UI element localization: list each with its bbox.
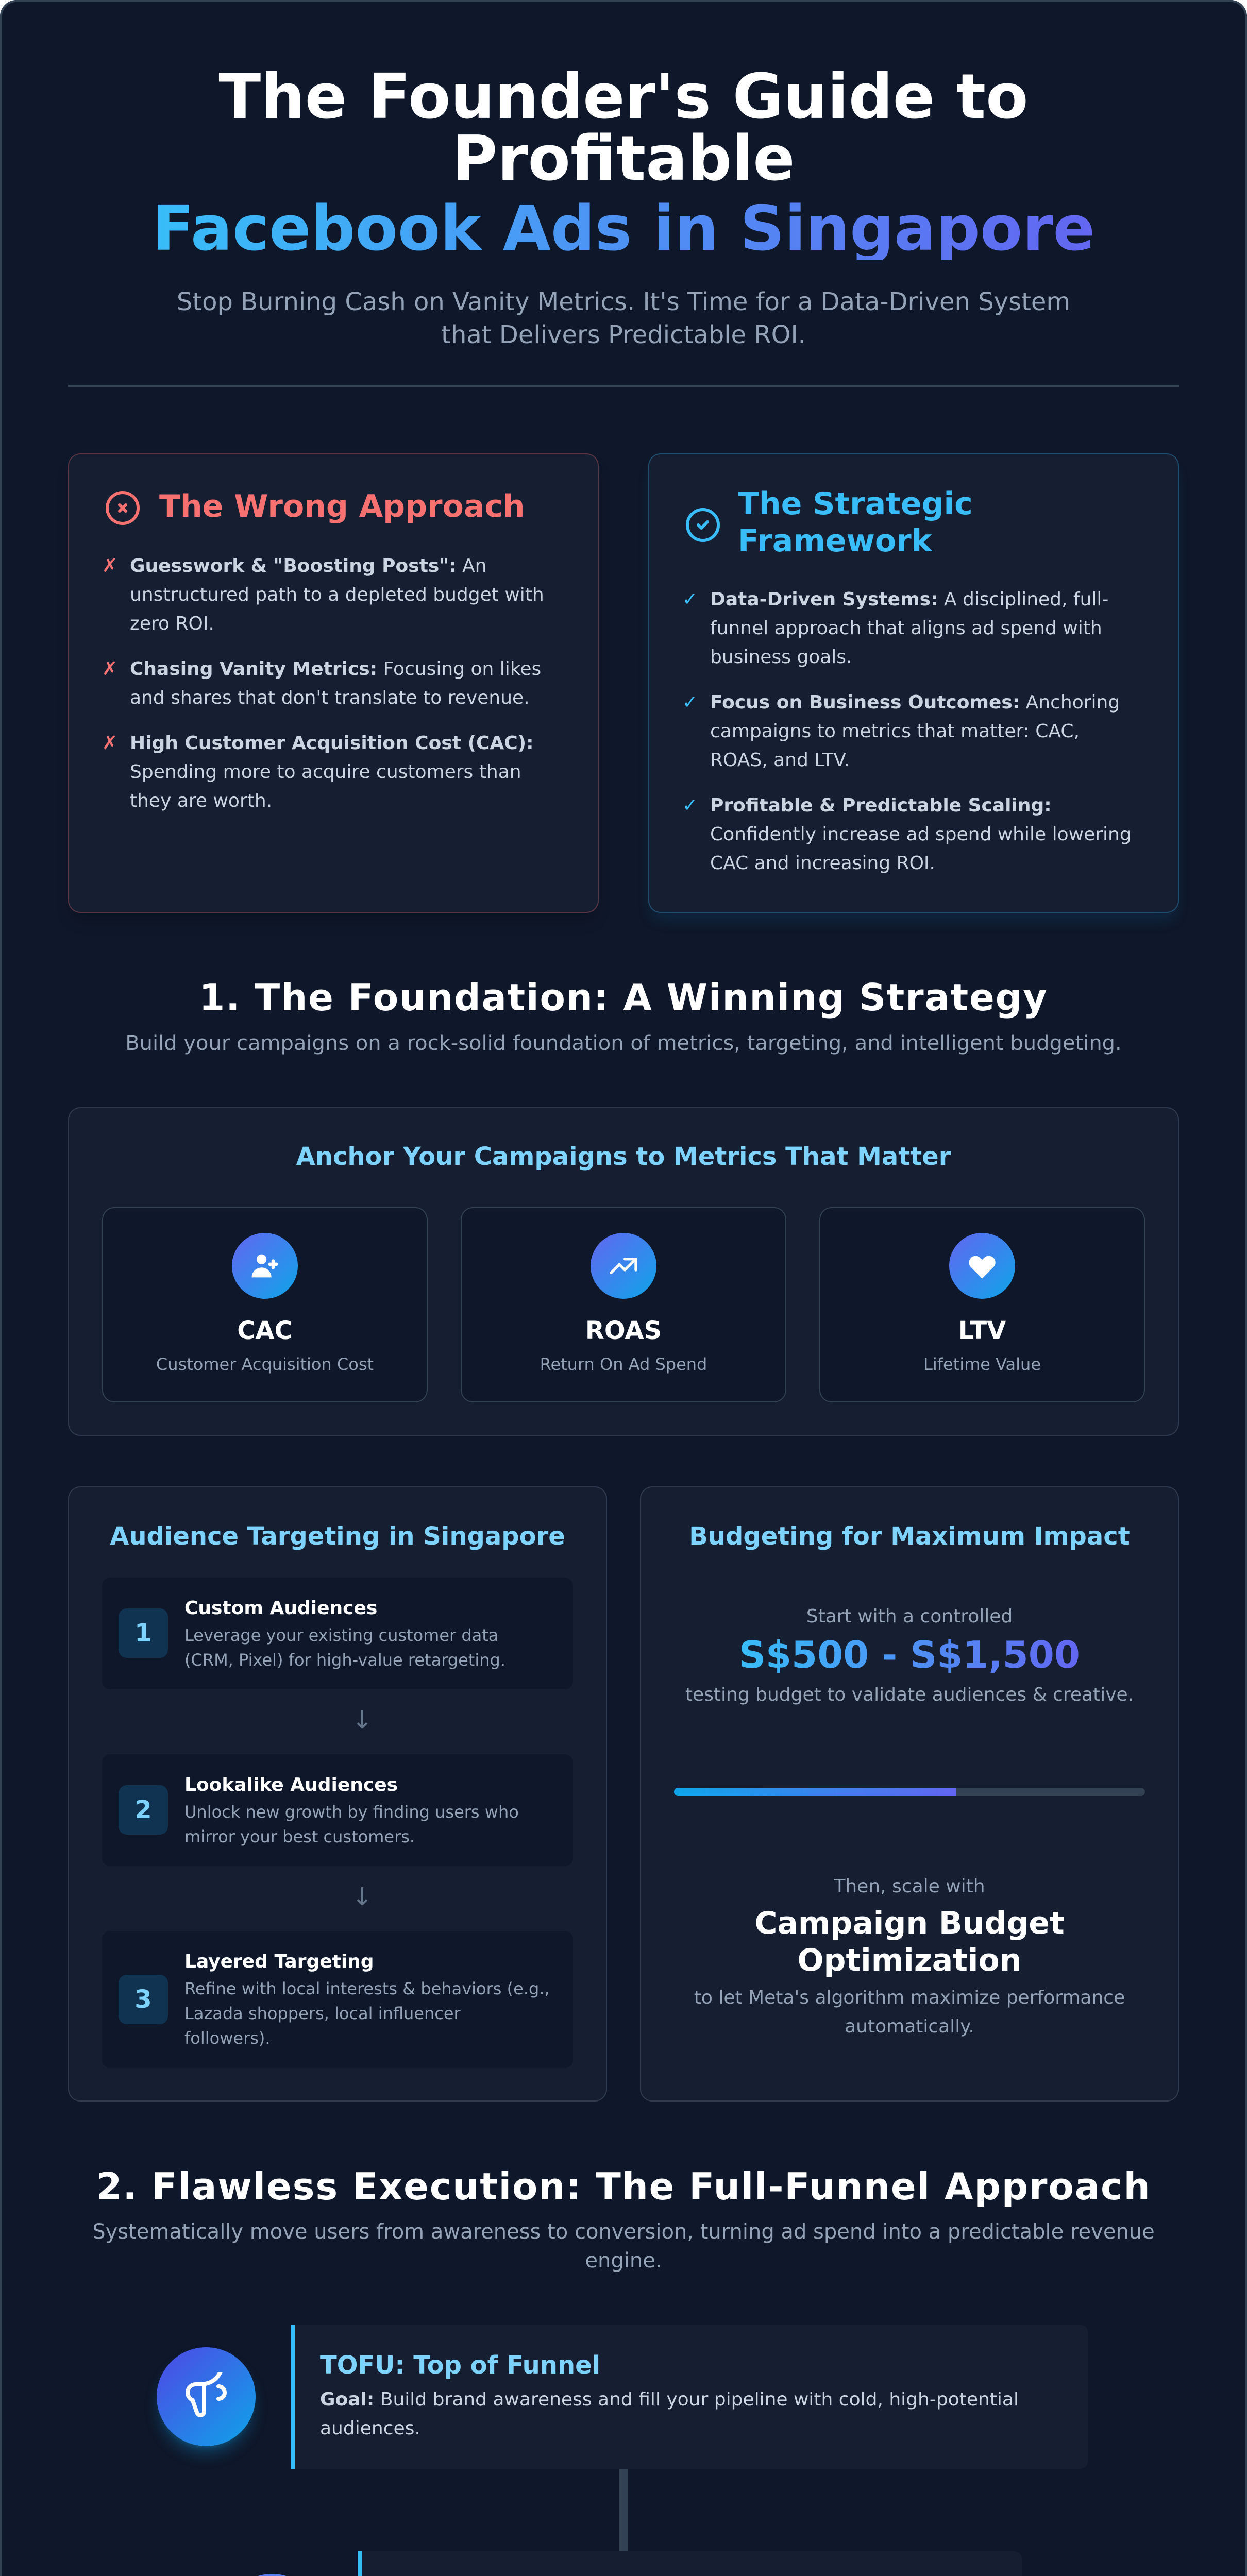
list item: high CAC: High Customer Acquisition Cost (CAC): — [130, 733, 534, 754]
heading: the strategic framework: Framework — [738, 523, 932, 559]
icon: light bulb — [223, 2574, 322, 2576]
subtitle: Stop Burning Cash on Vanity Metrics. It's Time for a Data-Driven System — [177, 287, 1070, 316]
stage goal — [320, 2389, 1019, 2439]
list item: business outcomes: ROAS, and LTV. — [710, 750, 850, 771]
funnel stage: MOFU — [258, 2551, 362, 2576]
icon: megaphone — [157, 2347, 256, 2446]
list item: vanity metrics: and shares that don't translate to revenue. — [130, 687, 530, 708]
text: testing budget: testing budget to validate audiences & creative. — [685, 1684, 1134, 1705]
step title: Lookalike Audiences — [184, 1774, 398, 1795]
list item: vanity metrics: ✗ — [102, 658, 117, 680]
icon: x in circle — [106, 491, 140, 525]
funnel stage: TOFU — [153, 2325, 1019, 2469]
list item: data-driven systems — [682, 589, 1108, 668]
list item: data-driven systems: funnel approach that aligns ad spend with — [710, 618, 1102, 639]
panel: metrics that matter — [68, 1107, 1179, 1436]
title: Profitable — [452, 123, 795, 195]
icon: user plus — [232, 1233, 298, 1299]
list item: vanity metrics — [102, 658, 541, 708]
panel: the wrong approach — [68, 453, 599, 913]
step title: Layered Targeting — [184, 1951, 374, 1972]
heading: the strategic framework: The Strategic — [738, 486, 973, 522]
arrow: ↓ — [352, 1883, 373, 1911]
arrow: ↓ — [352, 1706, 373, 1735]
subheading: section 1: Build your campaigns on a rock-solid foundation of metrics, targeting, and intelligent budgeting. — [125, 1031, 1122, 1055]
metric name: ROAS — [585, 1316, 662, 1345]
title — [152, 61, 1095, 265]
step 1: custom audiences — [102, 1578, 573, 1689]
heading: metrics: Anchor Your Campaigns to Metrics That Matter — [296, 1142, 951, 1171]
list item: high CAC — [102, 733, 534, 811]
list item: profitable scaling: Confidently increase ad spend while lowering — [710, 824, 1132, 845]
step 2: lookalike audiences — [102, 1754, 573, 1866]
icon: check in circle — [686, 508, 720, 542]
step title: Custom Audiences — [184, 1598, 377, 1619]
list item: guesswork: zero ROI. — [130, 613, 214, 634]
text: meta algorithm — [694, 1987, 1125, 2037]
list item: business outcomes: ✓ — [682, 692, 698, 713]
step description: Refine with local interests & behaviors (e.g., — [184, 1979, 550, 1998]
list item: guesswork: unstructured path to a depleted budget with — [130, 584, 544, 605]
step number: 3 — [134, 1985, 152, 2014]
heading: section 1: 1. The Foundation: A Winning Strategy — [199, 976, 1048, 1019]
metric description: Return On Ad Spend — [540, 1354, 707, 1374]
subtitle — [177, 287, 1070, 349]
stage goal: audiences. — [320, 2418, 420, 2439]
step number — [119, 1785, 168, 1835]
list item: business outcomes — [682, 692, 1120, 771]
subheading: section 2: Systematically move users from awareness to conversion, turning ad spend into a predictable revenue — [92, 2220, 1155, 2244]
progress bar — [674, 1788, 1145, 1796]
step description: mirror your best customers. — [184, 1827, 415, 1846]
step description: (CRM, Pixel) for high-value retargeting. — [184, 1650, 505, 1670]
panel: the strategic framework — [648, 453, 1179, 913]
list item: data-driven systems: business goals. — [710, 647, 852, 668]
subtitle: that Delivers Predictable ROI. — [441, 320, 806, 349]
title highlight: Facebook Ads in Singapore: Facebook Ads in Singapore — [152, 193, 1095, 265]
list item: guesswork: Guesswork & "Boosting Posts": An — [130, 555, 486, 577]
metric name: CAC — [237, 1316, 293, 1345]
heading: the wrong approach: The Wrong Approach — [159, 488, 525, 524]
list item: guesswork — [102, 555, 544, 634]
metric description: Lifetime Value — [923, 1354, 1041, 1374]
step number — [119, 1975, 168, 2024]
list item: high CAC: they are worth. — [130, 790, 272, 811]
metric card: CAC — [102, 1207, 428, 1402]
stage title — [386, 2575, 720, 2576]
icon: heart — [949, 1233, 1015, 1299]
list item: business outcomes: campaigns to metrics that matter: CAC, — [710, 721, 1080, 742]
card: top of funnel — [291, 2325, 1088, 2469]
card: middle of funnel — [358, 2551, 1022, 2576]
step number — [119, 1608, 168, 1658]
budget figure: S$500 - S$1,500 — [739, 1633, 1080, 1676]
list item: profitable scaling: CAC and increasing ROI. — [710, 853, 935, 874]
list item: high CAC: Spending more to acquire customers than — [130, 761, 521, 783]
step description: Lazada shoppers, local influencer — [184, 2004, 461, 2023]
icon: trending up — [591, 1233, 656, 1299]
list item: profitable scaling: ✓ — [682, 795, 698, 816]
list item: profitable scaling — [682, 795, 1132, 874]
step description: followers). — [184, 2028, 271, 2048]
list item: high CAC: ✗ — [102, 733, 117, 754]
stage goal: Goal: Build brand awareness and fill your pipeline with cold, high-potential — [320, 2389, 1019, 2410]
heading: the strategic framework — [738, 486, 973, 559]
step number: 2 — [134, 1795, 152, 1824]
text: meta algorithm: to let Meta's algorithm maximize performance — [694, 1987, 1125, 2008]
step description: Unlock new growth by finding users who — [184, 1802, 519, 1822]
metric card: ROAS — [461, 1207, 786, 1402]
step description: Leverage your existing customer data — [184, 1625, 498, 1645]
subheading: section 2: engine. — [585, 2249, 662, 2273]
list item: vanity metrics: Chasing Vanity Metrics: Focusing on likes — [130, 658, 541, 680]
heading: section 2: 2. Flawless Execution: The Full-Funnel Approach — [96, 2165, 1151, 2208]
list item: data-driven systems: ✓ — [682, 589, 698, 610]
metric name: LTV — [958, 1316, 1006, 1345]
list item: data-driven systems: Data-Driven Systems: A disciplined, full- — [710, 589, 1108, 610]
highlight: campaign budget optimization: Campaign Budget — [754, 1905, 1065, 1941]
subheading: section 2 — [92, 2220, 1155, 2273]
panel: budgeting — [640, 1486, 1179, 2102]
step 3: layered targeting — [102, 1931, 573, 2068]
text: meta algorithm: automatically. — [845, 2016, 974, 2037]
step description — [184, 1979, 550, 2048]
heading: budgeting: Budgeting for Maximum Impact — [689, 1522, 1130, 1551]
list item: profitable scaling: Profitable & Predictable Scaling: — [710, 795, 1052, 816]
text: then scale: Then, scale with — [834, 1876, 985, 1897]
highlight: campaign budget optimization: Optimization — [798, 1942, 1021, 1978]
stage title: TOFU: Top of Funnel — [320, 2351, 600, 2380]
metric card: LTV — [819, 1207, 1145, 1402]
text: start: Start with a controlled — [806, 1606, 1013, 1627]
step description — [184, 1802, 519, 1846]
step number: 1 — [134, 1619, 152, 1648]
title: The Founder's Guide to — [218, 61, 1029, 133]
list item: business outcomes: Focus on Business Outcomes: Anchoring — [710, 692, 1120, 713]
heading: audience targeting: Audience Targeting in Singapore — [110, 1522, 565, 1551]
panel: audience targeting — [68, 1486, 607, 2102]
highlight: campaign budget optimization — [754, 1905, 1065, 1978]
list item: guesswork: ✗ — [102, 555, 117, 577]
metric description: Customer Acquisition Cost — [156, 1354, 374, 1374]
step description — [184, 1625, 505, 1670]
